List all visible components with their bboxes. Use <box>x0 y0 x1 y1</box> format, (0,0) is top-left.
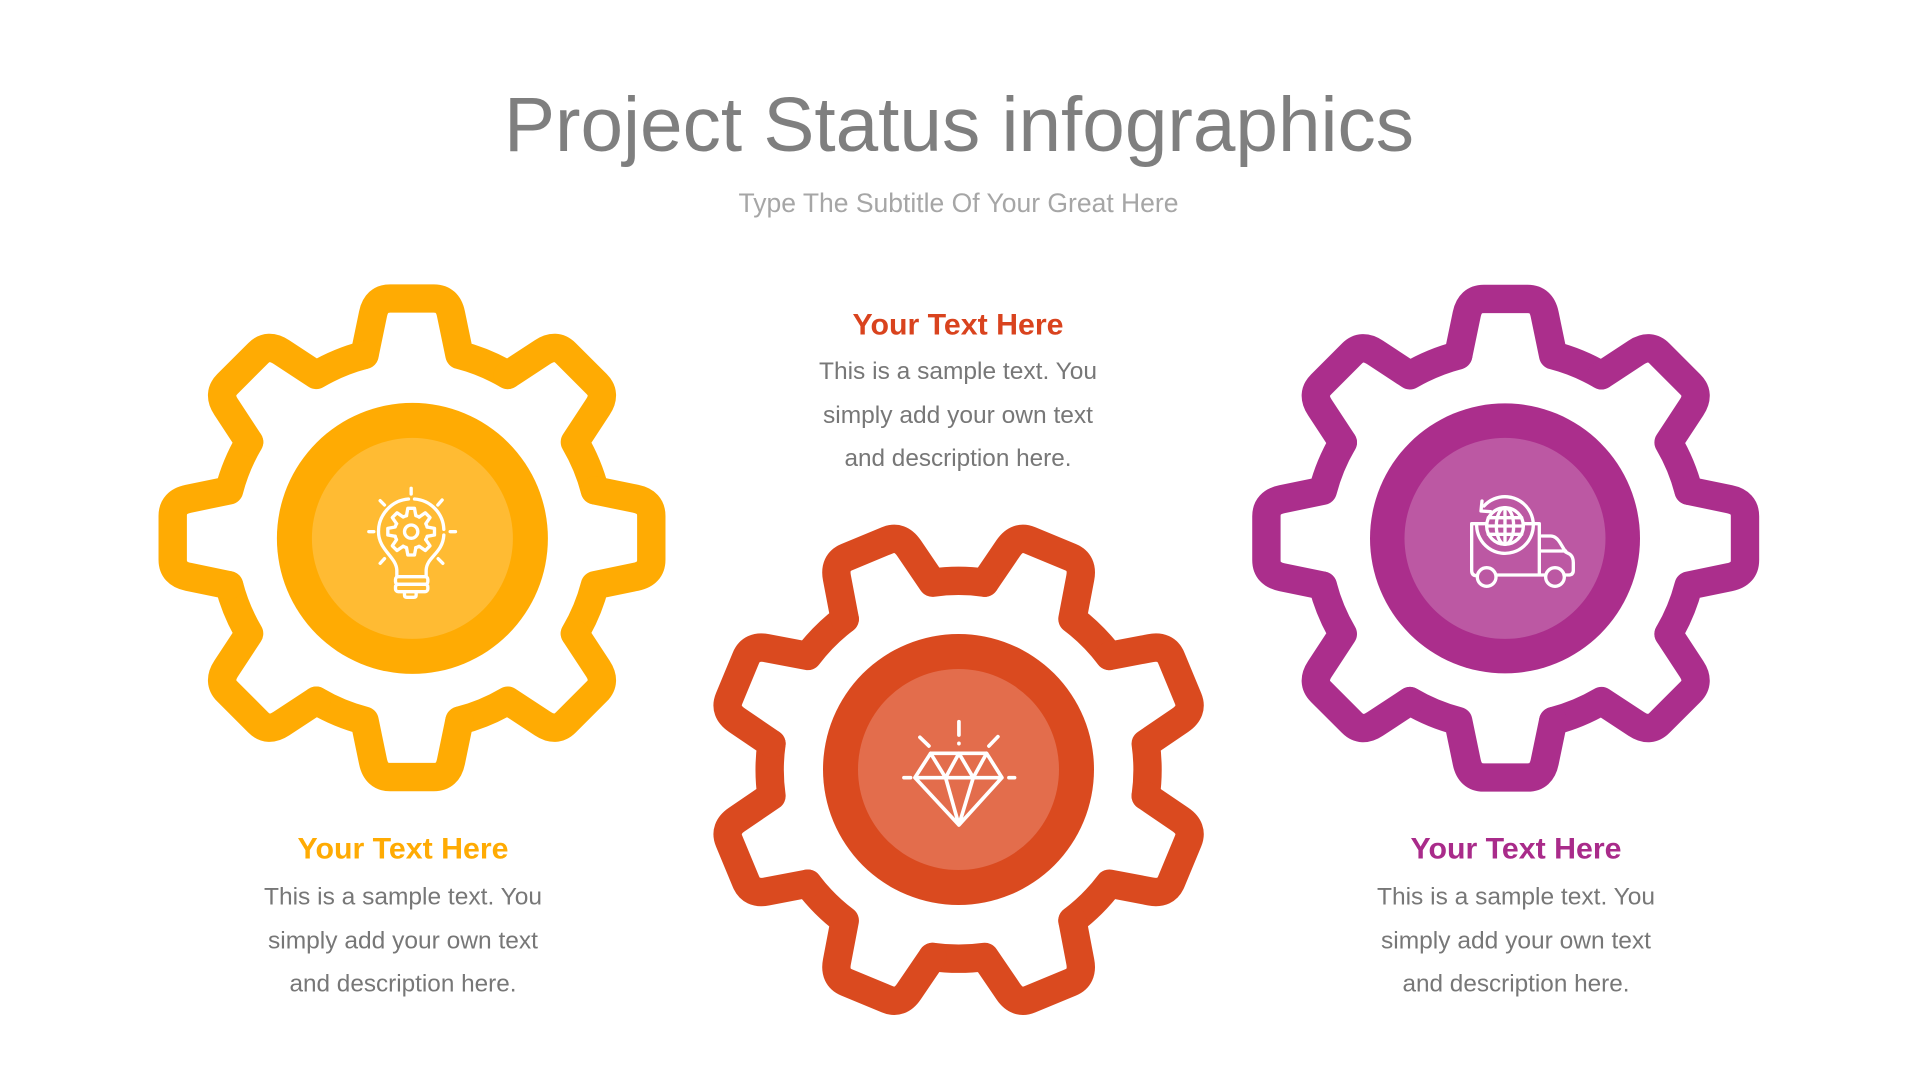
purple body text: and description here. <box>1402 970 1630 998</box>
icon: light bulb with gear <box>369 488 455 597</box>
subtitle: Type The Subtitle Of Your Great Here <box>738 188 1178 218</box>
red body text <box>819 358 1097 472</box>
panel: red gear <box>646 457 1271 1080</box>
red gear outline <box>646 457 1271 1080</box>
text block: red <box>819 308 1097 472</box>
purple body text <box>1377 884 1655 998</box>
yellow gear outline <box>173 299 651 777</box>
purple hub inner circle <box>1404 438 1606 639</box>
yellow body text <box>264 884 542 998</box>
text block: yellow <box>264 833 542 998</box>
purple body text: This is a sample text. You <box>1377 884 1655 910</box>
red hub outer circle <box>823 634 1094 905</box>
purple gear outline <box>1266 299 1745 777</box>
red body text: simply add your own text <box>823 402 1093 429</box>
yellow hub outer circle <box>277 403 548 674</box>
purple body text: simply add your own text <box>1381 928 1651 954</box>
purple heading: Your Text Here <box>1410 833 1622 866</box>
title: Project Status infographics <box>504 82 1414 168</box>
red hub inner circle <box>858 669 1059 870</box>
red body text: and description here. <box>844 445 1072 472</box>
text block: purple <box>1377 833 1655 998</box>
red body text: This is a sample text. You <box>819 358 1097 385</box>
purple hub outer circle <box>1370 403 1640 673</box>
panel: purple gear <box>1266 299 1745 777</box>
yellow body text: simply add your own text <box>268 928 538 954</box>
icon: diamond <box>904 722 1015 825</box>
yellow body text: and description here. <box>290 970 516 998</box>
panel: yellow gear <box>173 299 651 777</box>
red heading: Your Text Here <box>852 308 1064 342</box>
icon: delivery truck with globe <box>1472 497 1573 586</box>
yellow heading: Your Text Here <box>298 833 508 866</box>
yellow body text: This is a sample text. You <box>264 884 542 910</box>
yellow hub inner circle <box>312 438 513 639</box>
